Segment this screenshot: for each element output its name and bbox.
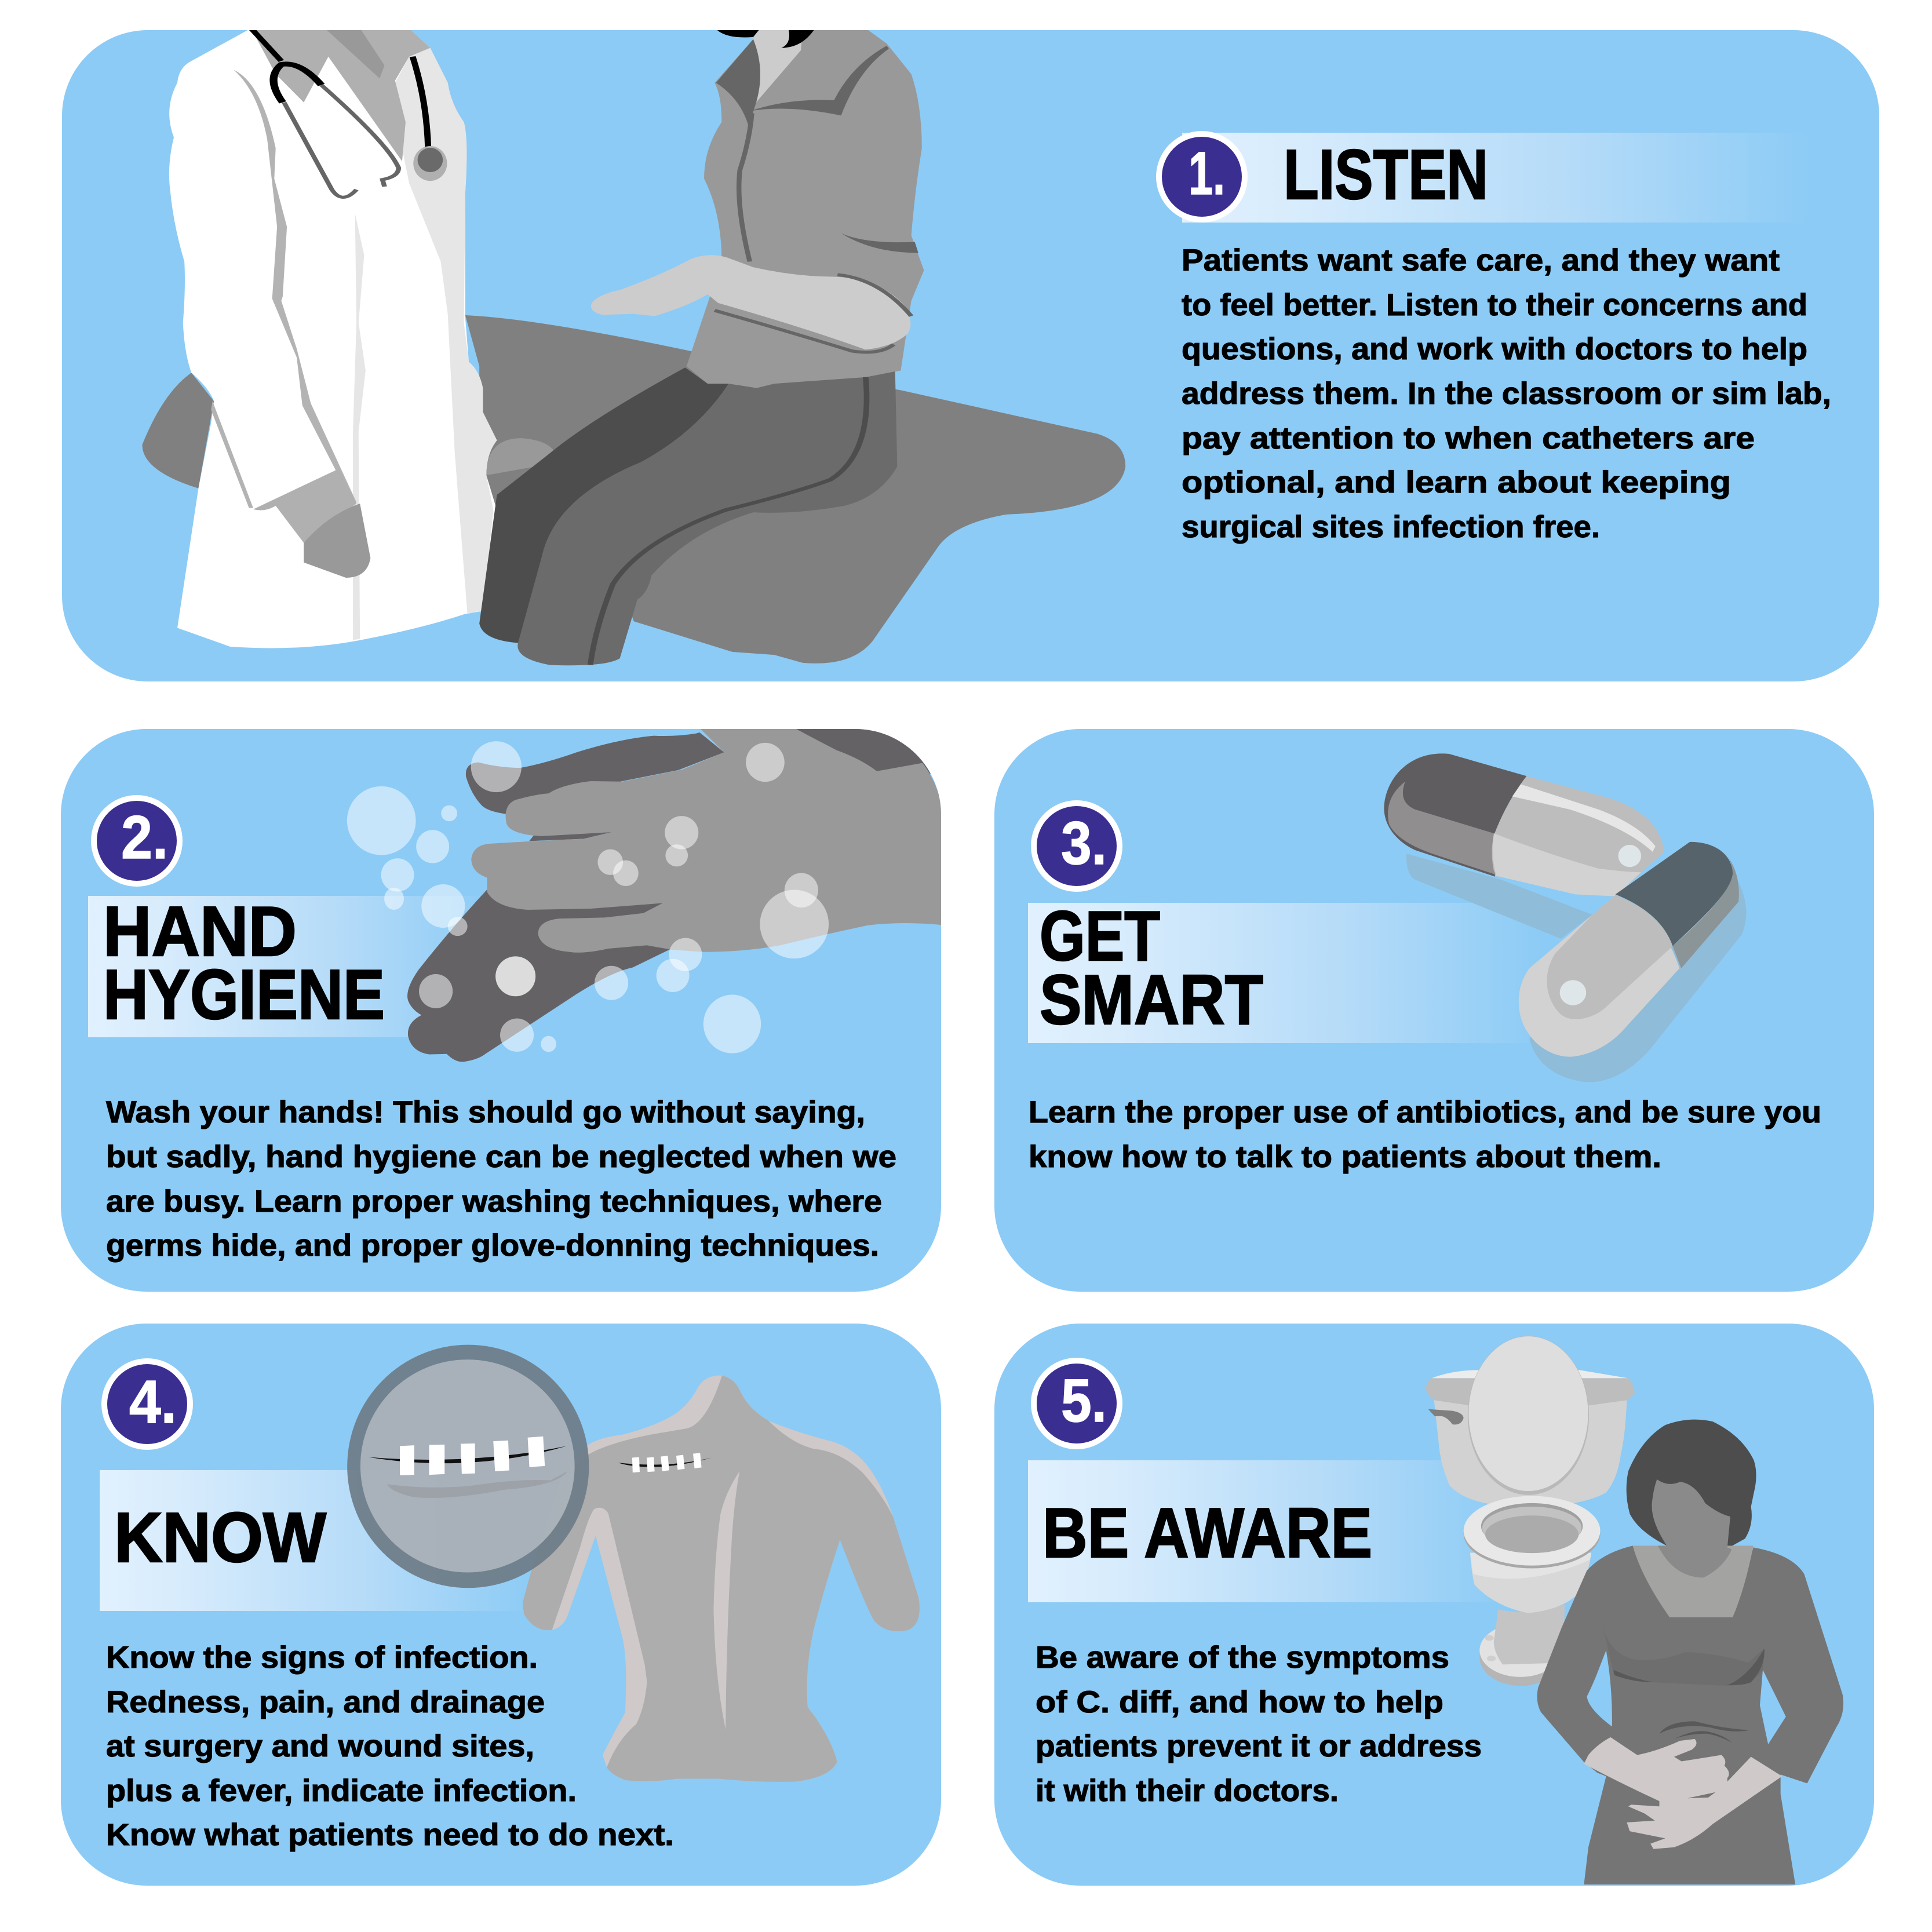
panel background (994, 1324, 1874, 1886)
panel: be aware (994, 1324, 1874, 1886)
heading: know: KNOW (114, 1498, 327, 1577)
body text: at surgery and wound sites, (106, 1729, 534, 1763)
illustration: back with surgical wound (347, 1345, 920, 1782)
body text: but sadly, hand hygiene can be neglected when we (106, 1140, 896, 1174)
number badge 3 (1031, 800, 1122, 892)
body text: Redness, pain, and drainage (106, 1685, 545, 1719)
heading band (1028, 903, 1544, 1043)
heading: get smart (1040, 896, 1263, 1039)
body text: to feel better. Listen to their concerns and (1182, 288, 1807, 322)
heading: be aware: BE AWARE (1042, 1493, 1372, 1572)
body text: Learn the proper use of antibiotics, and be sure you (1029, 1095, 1821, 1129)
body text: address them. In the classroom or sim lab, (1182, 377, 1831, 411)
body text: pay attention to when catheters are (1182, 421, 1755, 455)
body text: Know the signs of infection. (106, 1641, 538, 1675)
body text: questions, and work with doctors to help (1182, 332, 1807, 366)
number badge 2 (91, 795, 183, 887)
body text (1029, 1095, 1821, 1174)
body text: plus a fever, indicate infection. (106, 1774, 577, 1808)
heading: get smart: SMART (1040, 960, 1263, 1039)
number badge 4: 4. (129, 1368, 177, 1436)
body text: Patients want safe care, and they want (1182, 243, 1780, 278)
body text: optional, and learn about keeping (1182, 465, 1731, 500)
panel: hand hygiene (61, 728, 945, 1292)
panel: listen (62, 28, 1879, 681)
illustration: toilet and woman (1426, 1336, 1843, 1884)
panel background (994, 729, 1874, 1292)
body text: Be aware of the symptoms (1036, 1641, 1449, 1675)
panel background (62, 30, 1879, 681)
body text: Wash your hands! This should go without saying, (106, 1095, 865, 1129)
illustration: doctor and patient (142, 28, 1125, 665)
body text (1182, 243, 1831, 544)
number badge 5: 5. (1061, 1367, 1107, 1435)
heading: listen: LISTEN (1284, 135, 1488, 214)
heading band (100, 1470, 534, 1611)
body text: surgical sites infection free. (1182, 510, 1600, 544)
number badge 5 (1031, 1358, 1122, 1449)
body text (1036, 1641, 1482, 1808)
illustration: washing hands (347, 728, 945, 1062)
body text: of C. diff, and how to help (1036, 1685, 1443, 1719)
heading: hand hygiene: HYGIENE (103, 955, 385, 1034)
panel: get smart (994, 729, 1874, 1292)
panel background (61, 1324, 941, 1886)
heading band (1028, 1460, 1509, 1602)
heading band (88, 896, 494, 1037)
number badge 3: 3. (1061, 810, 1107, 877)
body text: germs hide, and proper glove-donning techniques. (106, 1229, 879, 1263)
number badge 1: 1. (1189, 140, 1225, 207)
number badge 2: 2. (121, 804, 168, 872)
body text: are busy. Learn proper washing techniques, where (106, 1184, 882, 1219)
body text (106, 1641, 674, 1852)
body text: it with their doctors. (1036, 1774, 1339, 1808)
panel: know (61, 1324, 941, 1886)
heading: hand hygiene (103, 892, 385, 1034)
heading band (1182, 133, 1811, 223)
illustration: capsules (1384, 753, 1746, 1082)
heading: get smart: GET (1040, 896, 1160, 975)
body text (106, 1095, 896, 1263)
body text: Know what patients need to do next. (106, 1818, 674, 1852)
heading: hand hygiene: HAND (103, 892, 297, 971)
number badge 4 (101, 1358, 193, 1450)
number badge 1 (1156, 131, 1248, 223)
panel background (61, 729, 941, 1292)
body text: patients prevent it or address (1036, 1729, 1482, 1763)
body text: know how to talk to patients about them. (1029, 1140, 1661, 1174)
